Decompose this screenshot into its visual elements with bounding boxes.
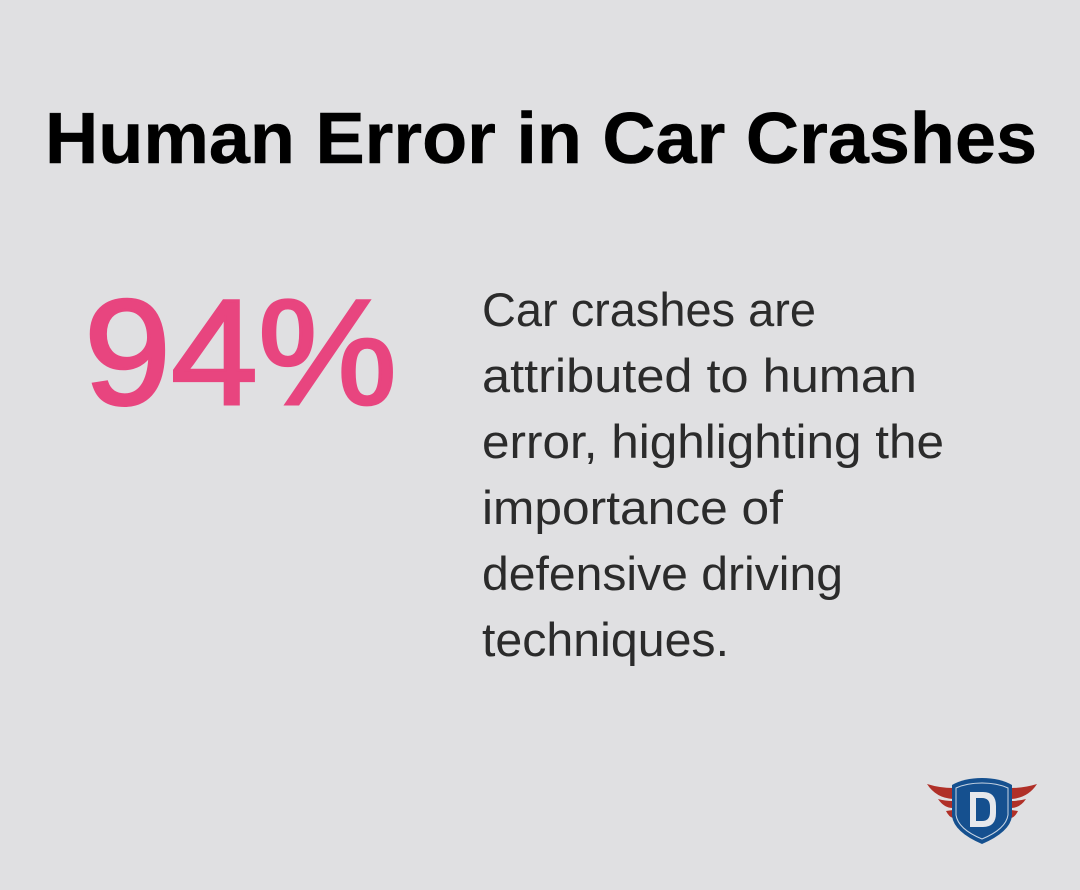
description text block xyxy=(482,283,944,666)
description text block: Car crashes are xyxy=(482,283,816,336)
description text block: defensive driving xyxy=(482,547,843,600)
description text block: importance of xyxy=(482,481,784,534)
description text block: techniques. xyxy=(482,613,729,666)
big statistic: 94%: 94% xyxy=(84,268,397,436)
description text block: error, highlighting the xyxy=(482,415,944,468)
description text block: attributed to human xyxy=(482,349,917,402)
icon: winged shield logo xyxy=(927,778,1037,844)
title: Human Error in Car Crashes xyxy=(45,99,1037,179)
